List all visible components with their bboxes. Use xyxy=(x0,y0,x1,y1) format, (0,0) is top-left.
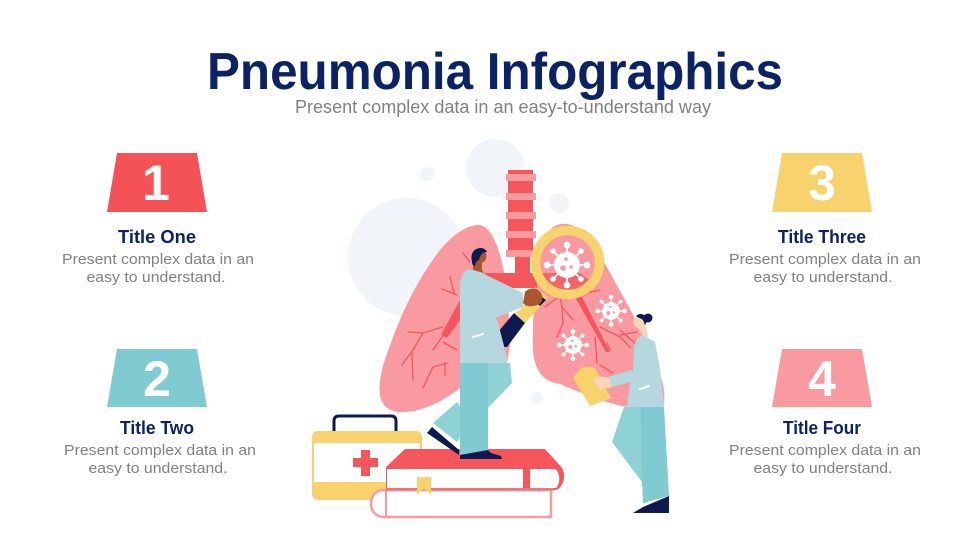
heading: title four: Title Four xyxy=(783,418,861,438)
text block: item 4: Present complex data in an xyxy=(729,442,921,459)
text block: item 3: easy to understand. xyxy=(754,269,892,286)
handle xyxy=(515,287,548,323)
upper book xyxy=(386,449,564,495)
text block: item 1: easy to understand. xyxy=(86,269,226,286)
shoe xyxy=(633,496,669,513)
first aid kit xyxy=(312,416,422,500)
number badge 4: 4 xyxy=(808,351,836,407)
title: Pneumonia Infographics xyxy=(207,43,783,101)
text block: item 1: Present complex data in an xyxy=(62,251,254,268)
hand xyxy=(523,288,542,306)
virus particles xyxy=(557,295,627,361)
text block: item 2: easy to understand. xyxy=(88,460,228,477)
heading: title one: Title One xyxy=(118,227,196,247)
panel: item 4 xyxy=(729,349,921,477)
heading: title two: Title Two xyxy=(120,418,194,438)
panel: item 3 xyxy=(729,153,921,286)
number badge 2: 2 xyxy=(143,351,171,407)
panel: item 1 xyxy=(62,153,254,286)
left lung xyxy=(380,225,510,412)
number badge 2 xyxy=(107,349,207,407)
neck and head xyxy=(473,262,484,273)
background circles xyxy=(348,139,569,404)
doctor one xyxy=(427,248,542,459)
number badge 1: 1 xyxy=(142,155,170,211)
coat xyxy=(460,270,523,363)
back leg xyxy=(433,402,470,442)
neck and head xyxy=(637,326,648,337)
text block: item 4: easy to understand. xyxy=(754,460,892,477)
sleeve xyxy=(608,370,634,387)
heading: title three: Title Three xyxy=(778,227,866,247)
magnifying glass xyxy=(498,230,600,347)
bookmark xyxy=(417,477,431,495)
clipboard xyxy=(573,367,611,406)
number badge 4 xyxy=(772,349,872,407)
hand xyxy=(593,377,612,390)
front shoe xyxy=(460,450,502,459)
cross xyxy=(353,450,378,476)
central illustration xyxy=(312,139,669,517)
lower book xyxy=(371,490,551,517)
text block: item 3: Present complex data in an xyxy=(729,251,921,268)
number badge 1 xyxy=(107,153,207,212)
doctor two xyxy=(573,314,669,513)
right lung xyxy=(533,224,664,407)
trachea xyxy=(485,170,537,288)
text block: item 2: Present complex data in an xyxy=(64,442,256,459)
front pants xyxy=(488,363,512,408)
back shoe xyxy=(427,427,459,455)
pants xyxy=(612,407,646,503)
number badge 3 xyxy=(772,153,872,212)
coat xyxy=(627,335,664,407)
number badge 3: 3 xyxy=(808,155,836,211)
panel: item 2 xyxy=(64,349,256,477)
subtitle: Present complex data in an easy-to-understand way xyxy=(295,97,711,117)
